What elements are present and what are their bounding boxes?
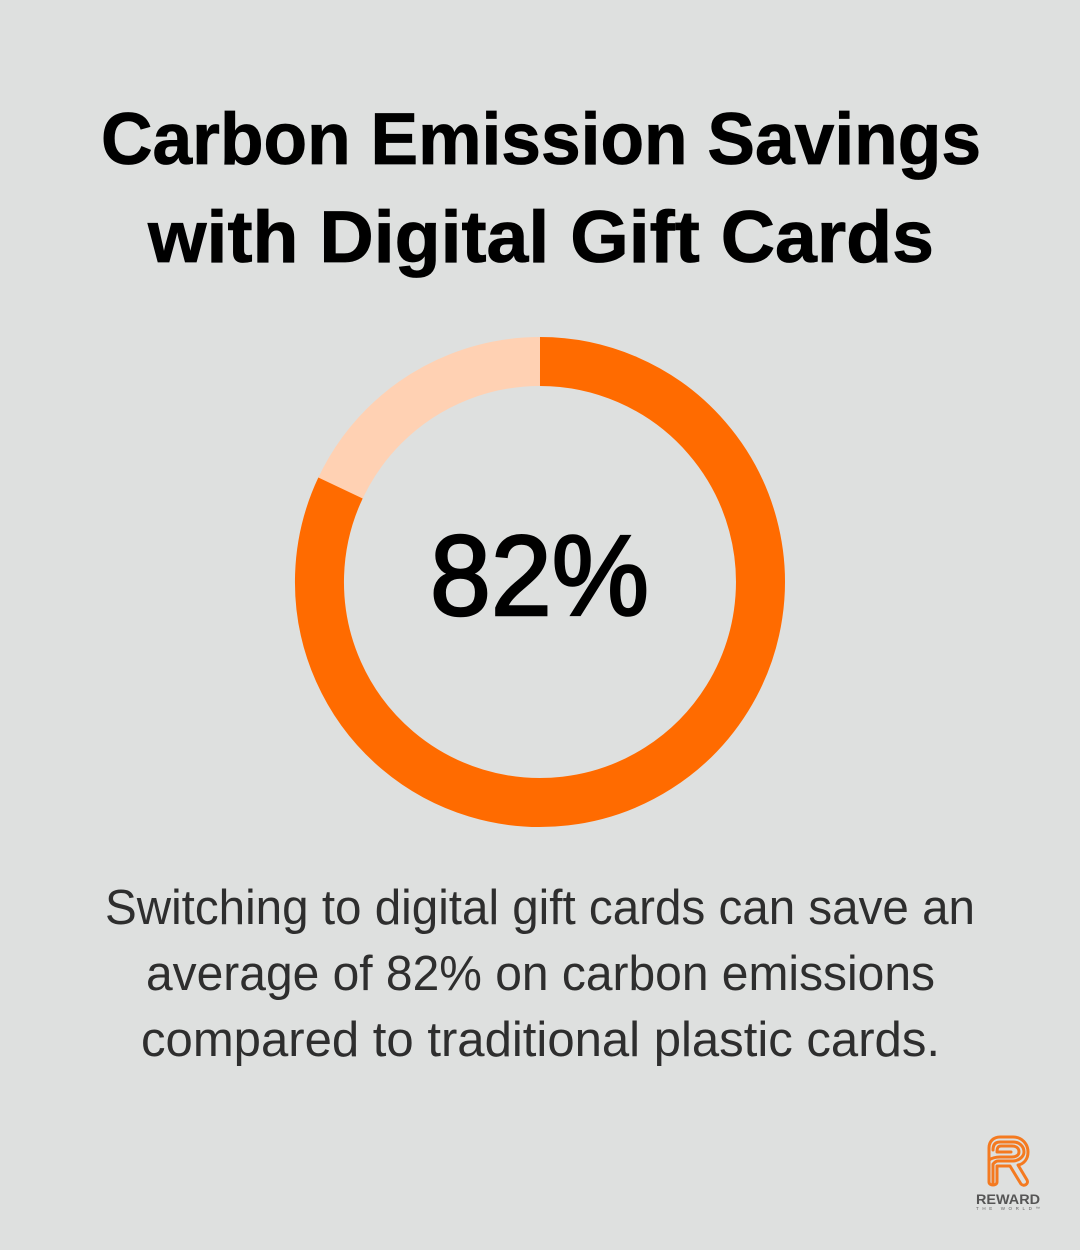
donut chart: 82%	[319, 362, 760, 803]
logo wordmark: REWARD	[976, 1192, 1040, 1207]
title	[101, 99, 981, 278]
donut value: 82%	[430, 513, 649, 640]
description text: Switching to digital gift cards can save an	[105, 881, 975, 935]
description text	[105, 881, 975, 1067]
title: Carbon Emission Savings	[101, 99, 981, 180]
icon: stylised R	[989, 1137, 1028, 1185]
description text: compared to traditional plastic cards.	[141, 1013, 940, 1067]
logo: Reward the World	[976, 1137, 1040, 1211]
logo tagline: THE WORLD™	[976, 1206, 1040, 1211]
description text: average of 82% on carbon emissions	[146, 947, 935, 1001]
title: with Digital Gift Cards	[147, 197, 934, 278]
